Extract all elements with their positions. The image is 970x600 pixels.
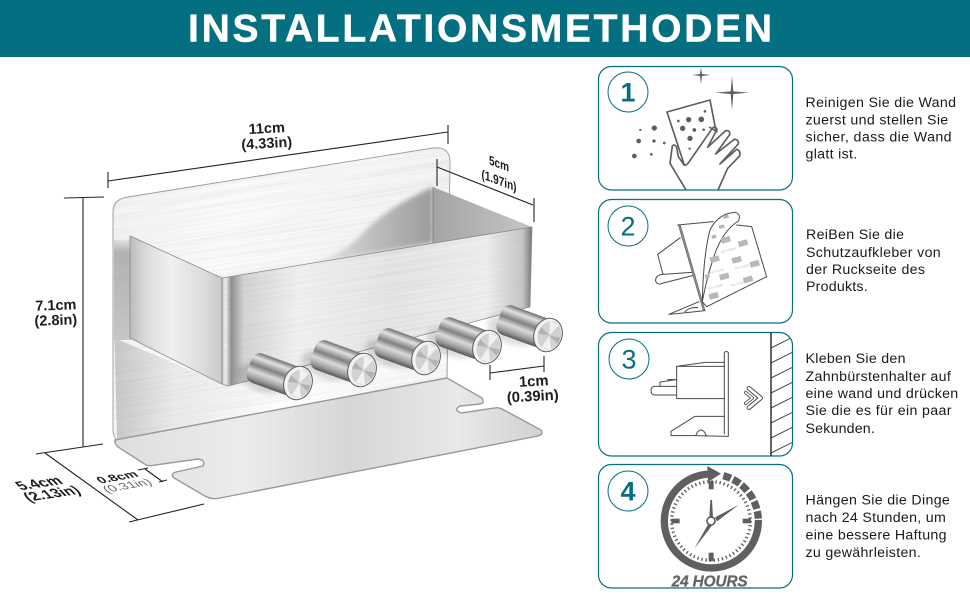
text: step 1 bbox=[806, 95, 956, 162]
peg 2 bbox=[297, 333, 381, 395]
shadow in box on plate bbox=[322, 186, 435, 261]
number 1 bbox=[608, 72, 648, 112]
dimension: 1cm peg: 1cm bbox=[519, 373, 549, 391]
text: step 2: ReiBen Sie die bbox=[806, 227, 904, 243]
number 2 bbox=[608, 206, 648, 246]
panel: step 4 bbox=[598, 464, 950, 590]
dimension: 11cm width bbox=[108, 120, 448, 188]
number 3 bbox=[609, 339, 649, 379]
text: step 3: eine wand und drücken bbox=[806, 386, 958, 402]
dimension: 5cm box depth: 5cm bbox=[489, 152, 509, 175]
product: stainless steel holder bbox=[112, 147, 563, 500]
icon: peeling adhesive: PE FOAM bbox=[709, 267, 725, 275]
dimension: 5.4cm depth: (2.13in) bbox=[20, 484, 85, 505]
label: 24 hours: 24 HOURS bbox=[671, 573, 748, 590]
peg 5 bbox=[483, 298, 567, 360]
dimension: 1cm peg: (0.39in) bbox=[507, 388, 559, 406]
box left face bbox=[130, 236, 222, 384]
text: step 3: Kleben Sie den bbox=[806, 351, 906, 367]
icon: wall bbox=[771, 332, 795, 456]
back plate bbox=[113, 148, 450, 441]
left plate strip bbox=[114, 240, 131, 340]
icon: sponge and hand bbox=[632, 67, 749, 189]
icon: clock bbox=[664, 466, 758, 590]
text: step 4: nach 24 Stunden, um bbox=[806, 510, 946, 526]
icon: peeling adhesive: PE FOAM bbox=[721, 246, 737, 254]
inner edge bbox=[432, 187, 434, 243]
header banner bbox=[0, 0, 970, 57]
text: step 4: zu gewährleisten. bbox=[806, 545, 921, 561]
icon: peeling adhesive: PE FOAM bbox=[731, 280, 747, 288]
box inner wall bbox=[433, 187, 532, 243]
text: step 1: Reinigen Sie die Wand bbox=[806, 95, 956, 111]
text: step 4: eine bessere Haftung bbox=[806, 528, 946, 544]
number 1: 1 bbox=[620, 78, 636, 108]
text: step 1: sicher, dass die Wand bbox=[806, 130, 952, 146]
number 3: 3 bbox=[621, 344, 637, 374]
text: step 3: Sie die es für ein paar bbox=[806, 403, 952, 419]
text: step 3: Zahnbürstenhalter auf bbox=[806, 369, 951, 385]
lower plate shading bbox=[114, 300, 530, 440]
text: step 3: Sekunden. bbox=[806, 421, 875, 437]
icon: peeling adhesive: PE FOAM bbox=[734, 263, 750, 271]
text: step 3 bbox=[806, 351, 958, 437]
text: step 1: glatt ist. bbox=[806, 146, 857, 162]
dimension: 7.1cm height bbox=[34, 197, 104, 447]
box front face bbox=[222, 227, 532, 386]
dimension: 5cm box depth bbox=[437, 152, 534, 222]
text: step 2: Produkts. bbox=[806, 279, 868, 295]
peg 3 bbox=[361, 321, 445, 383]
number 4: 4 bbox=[620, 476, 636, 506]
text: step 2: der Ruckseite des bbox=[806, 262, 925, 278]
text: step 1: zuerst und stellen Sie bbox=[806, 112, 948, 128]
icon: chevrons bbox=[746, 388, 761, 408]
text: step 4 bbox=[806, 492, 950, 561]
dimension: 7.1cm height: (2.8in) bbox=[34, 312, 78, 330]
dimension: 0.8cm slot: (0.31in) bbox=[99, 476, 155, 495]
dimension: 1cm peg bbox=[490, 356, 559, 406]
dimension: 11cm width: 11cm bbox=[248, 120, 285, 138]
icon: peeling adhesive bbox=[656, 212, 767, 314]
dimension: 11cm width: (4.33in) bbox=[241, 135, 293, 153]
peg 1 bbox=[233, 346, 317, 408]
icon: peeling adhesive: PE FOAM bbox=[708, 283, 723, 291]
brushed texture bbox=[114, 154, 450, 434]
title: INSTALLATIONSMETHODEN bbox=[188, 8, 772, 50]
dimension: 0.8cm slot bbox=[93, 468, 167, 495]
panel: step 2 bbox=[598, 200, 941, 323]
dimension: 5.4cm depth: 5.4cm bbox=[12, 474, 67, 493]
panel: step 1 bbox=[598, 66, 956, 190]
peg 4 bbox=[422, 310, 506, 372]
dimension: 0.8cm slot: 0.8cm bbox=[93, 468, 141, 486]
text: step 2 bbox=[806, 227, 941, 295]
panel: step 3 bbox=[598, 332, 958, 456]
text: step 2: Schutzaufkleber von bbox=[806, 245, 941, 261]
front brushed texture bbox=[224, 237, 494, 384]
number 2: 2 bbox=[620, 212, 636, 242]
dimension: 5.4cm depth bbox=[12, 444, 204, 522]
dimension: 7.1cm height: 7.1cm bbox=[35, 297, 77, 315]
number 4 bbox=[608, 471, 648, 511]
floor tray bbox=[115, 378, 542, 499]
dimension: 5cm box depth: (1.97in) bbox=[481, 166, 517, 195]
text: step 4: Hängen Sie die Dinge bbox=[806, 492, 950, 508]
icon: holder side view bbox=[651, 351, 728, 436]
